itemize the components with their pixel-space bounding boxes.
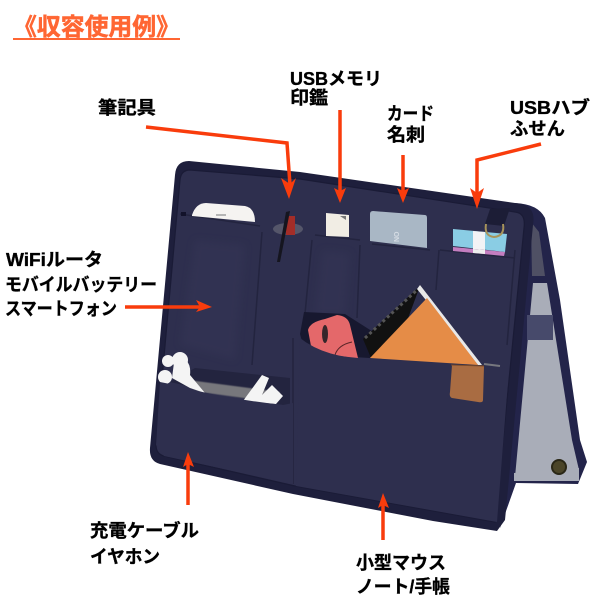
label: 小型マウス ノート/手帳: ノート/手帳 [356,577,450,597]
title: 《収容使用例》 [13,14,180,41]
organizer product photo [150,161,587,531]
item: grey felt [173,378,280,402]
label: 筆記具: 筆記具 [98,98,156,118]
item: notebook [363,285,482,365]
item: card: NO [394,231,401,242]
label: 小型マウス ノート/手帳: 小型マウス [356,553,446,573]
item: pocket snap stitch [484,364,500,366]
upper pockets and seams [180,214,515,484]
label: 小型マウス ノート/手帳 [356,553,450,597]
label: カード 名刺 [387,104,434,145]
label: 充電ケーブル イヤホン: イヤホン [90,547,160,567]
arrow: 小型マウス [378,493,389,540]
arrow: 充電ケーブル [183,452,194,505]
item: leather tab [450,365,484,402]
item: strap and ring [485,208,510,237]
item: pen [273,211,303,262]
arrow: 筆記具 [146,127,296,199]
label: USBハブ ふせん: USBハブ [510,97,590,118]
label: WiFiルータ モバイルバッテリー スマートフォン: モバイルバッテリー [5,275,157,295]
item: cables [243,375,283,404]
arrow: USBハブ [470,144,541,209]
label: USBメモリ 印鑑: 印鑑 [290,88,328,108]
arrow: USBメモリ [334,110,346,203]
label: USBメモリ 印鑑: USBメモリ [290,69,382,89]
item: earphones [158,352,205,393]
item: USB memory [326,213,349,237]
label: USBメモリ 印鑑 [290,69,382,108]
item: mouse [308,315,358,358]
label: 充電ケーブル イヤホン: 充電ケーブル [90,520,199,541]
label: 充電ケーブル イヤホン [90,520,199,567]
arrow: カード [397,155,409,203]
item: smartphone [181,203,255,222]
back stand panel [500,203,587,528]
front panel [150,161,534,531]
label: USBハブ ふせん: ふせん [510,119,565,139]
lower left pocket lip [156,382,293,484]
item: sticky notes [453,229,507,256]
arrow: スマートフォン [125,300,212,312]
big pocket opening [300,312,378,358]
screw [552,460,566,474]
label: カード 名刺: カード [387,104,434,124]
label: カード 名刺: 名刺 [387,125,425,145]
item: card [370,211,427,248]
label: WiFiルータ モバイルバッテリー スマートフォン [5,250,157,319]
lower left pocket opening [170,368,290,405]
label: WiFiルータ モバイルバッテリー スマートフォン: WiFiルータ [6,250,103,270]
label: WiFiルータ モバイルバッテリー スマートフォン: スマートフォン [5,299,117,319]
soft pocket shading [180,240,480,500]
big pocket [296,338,509,522]
label: USBハブ ふせん [510,97,590,139]
